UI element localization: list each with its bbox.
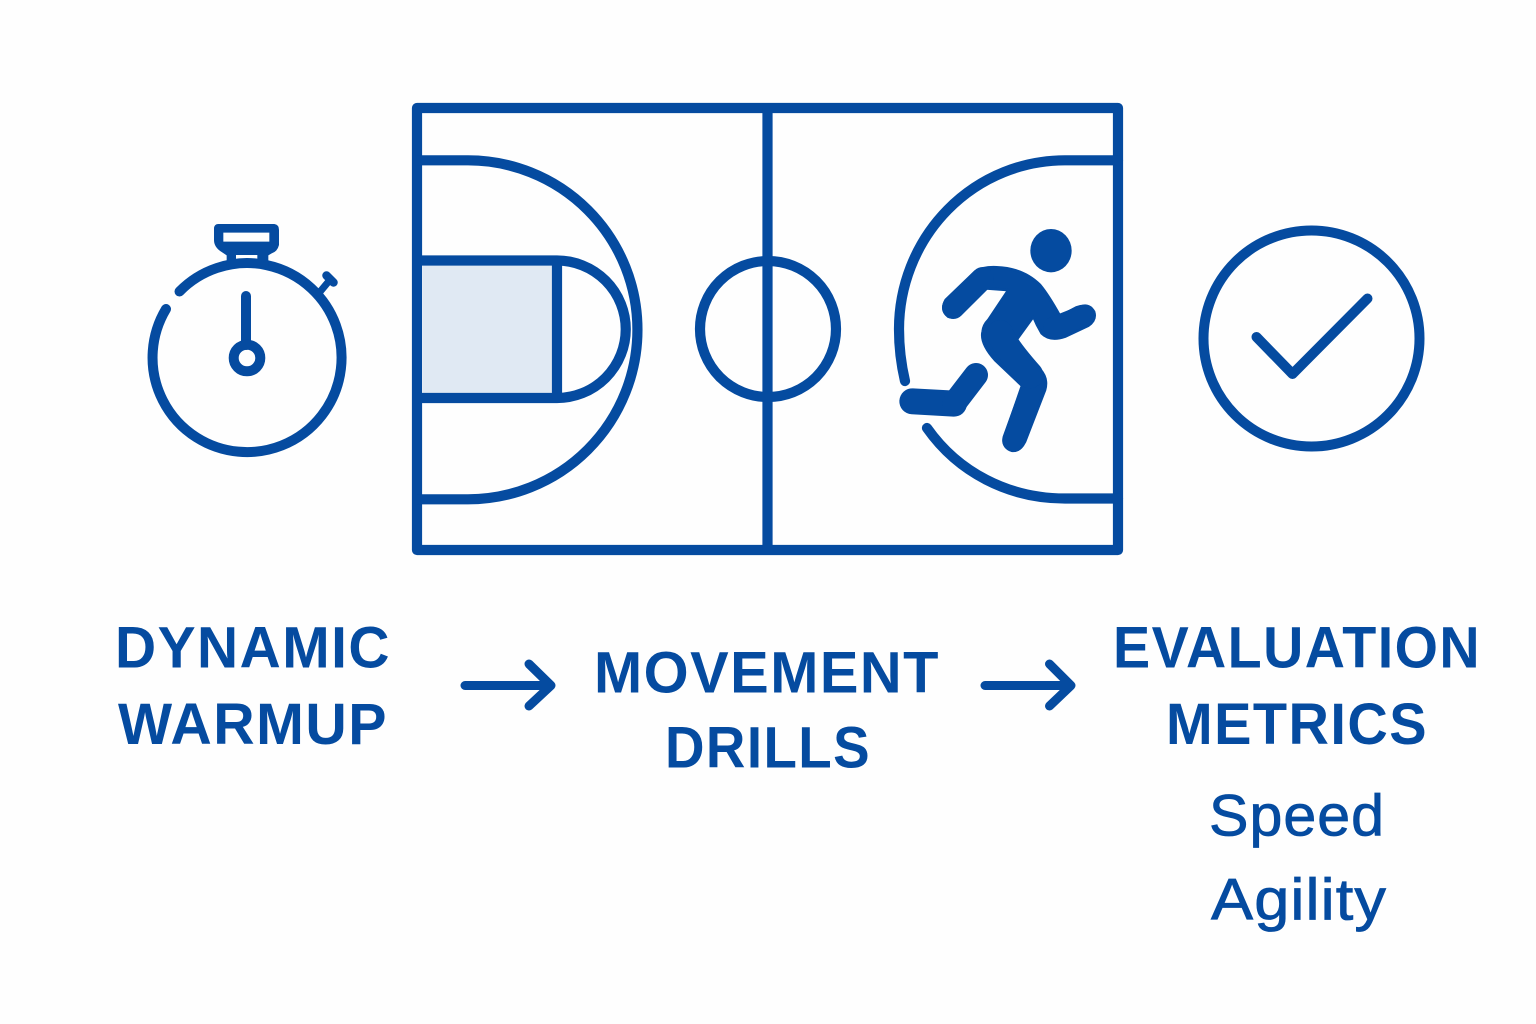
heading: movement drills bbox=[594, 640, 940, 780]
text: metrics list: Speed bbox=[1209, 784, 1385, 848]
heading: evaluation metrics bbox=[1113, 616, 1481, 757]
heading: movement drills: MOVEMENT bbox=[594, 640, 940, 706]
icon: stopwatch bbox=[153, 224, 342, 452]
icon: running figure bbox=[912, 229, 1095, 451]
shaded key bbox=[423, 264, 552, 394]
arrow: warmup to drills bbox=[465, 664, 551, 706]
text: metrics list bbox=[1209, 784, 1387, 932]
text: metrics list: Agility bbox=[1211, 868, 1387, 932]
heading: dynamic warmup: DYNAMIC bbox=[115, 615, 391, 680]
heading: dynamic warmup bbox=[115, 615, 391, 757]
heading: movement drills: DRILLS bbox=[665, 716, 871, 780]
heading: evaluation metrics: EVALUATION bbox=[1113, 616, 1481, 680]
heading: evaluation metrics: METRICS bbox=[1166, 692, 1428, 757]
arrow: drills to metrics bbox=[985, 664, 1071, 706]
icon: checkmark circle bbox=[1204, 230, 1420, 446]
illustration: basketball court bbox=[417, 108, 1118, 550]
heading: dynamic warmup: WARMUP bbox=[118, 692, 388, 757]
